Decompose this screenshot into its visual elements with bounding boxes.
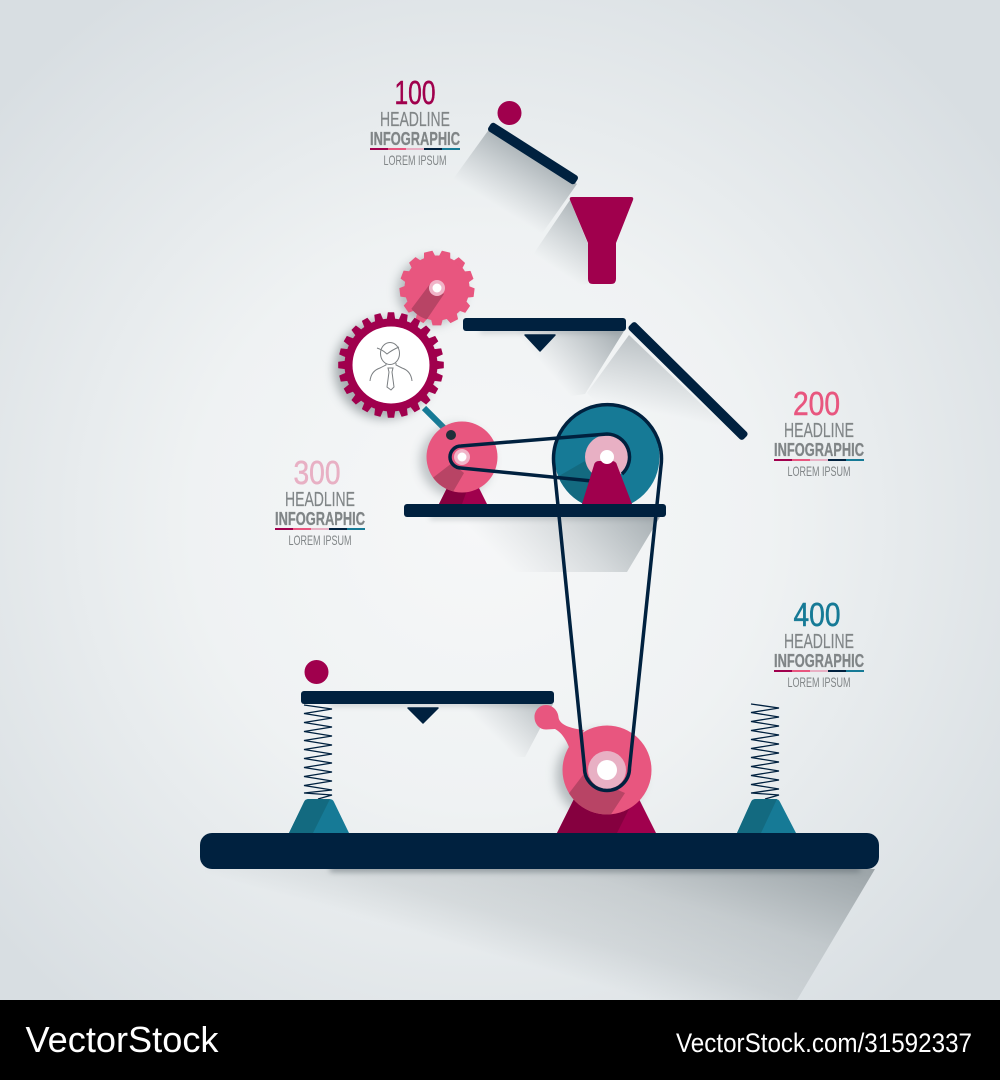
text block 100: HEADLINE	[380, 109, 450, 131]
text block 400: HEADLINE	[784, 631, 854, 653]
connecting rod	[424, 408, 452, 436]
spring right	[751, 704, 779, 799]
text block 300	[275, 454, 365, 548]
teal pulley stand	[582, 461, 632, 504]
lower lever pivot	[408, 708, 438, 723]
text block 200	[774, 385, 864, 479]
bottom pulley wheel with cam	[534, 705, 652, 822]
mid shelf	[404, 504, 666, 517]
text block 300: 300	[294, 454, 340, 491]
text block 200: INFOGRAPHIC	[774, 439, 864, 460]
base platform	[200, 833, 879, 869]
text block 300: HEADLINE	[285, 489, 355, 511]
text block 300: INFOGRAPHIC	[275, 508, 365, 529]
lower lever	[301, 691, 554, 704]
upper lever pivot	[525, 335, 555, 351]
gear shadow band	[412, 284, 444, 320]
bottom pulley stand	[557, 797, 656, 833]
text block 200: LOREM IPSUM	[788, 463, 850, 479]
footer logo: VectorStock	[26, 1019, 220, 1060]
left pulley soft shadow	[420, 425, 492, 497]
small belt	[450, 434, 630, 481]
right spring base	[737, 799, 796, 833]
large teal pulley	[555, 406, 660, 504]
teal pulley hub	[600, 450, 614, 464]
text block 100: 100	[394, 74, 436, 111]
tilted ramp right	[627, 321, 749, 441]
icon: person	[370, 342, 412, 390]
tilted ramp top	[487, 122, 579, 185]
text block 400	[774, 596, 864, 690]
long shadows	[205, 128, 875, 1000]
ball lower	[304, 660, 328, 684]
footer url: VectorStock.com/31592337	[676, 1028, 972, 1058]
left spring base	[289, 799, 349, 833]
text block 200: 200	[793, 385, 840, 422]
big gear with person	[334, 312, 444, 419]
text block 400: 400	[794, 596, 840, 633]
bottom pulley soft shadow	[556, 731, 644, 819]
text block 100: INFOGRAPHIC	[370, 128, 460, 149]
footer bar	[0, 1000, 1000, 1080]
upper lever	[463, 318, 626, 331]
text block 300: LOREM IPSUM	[288, 532, 352, 548]
left pulley wheel	[426, 422, 498, 497]
text block 400: LOREM IPSUM	[788, 674, 850, 690]
ball top	[498, 101, 522, 125]
small pink gear	[397, 251, 474, 325]
long belt	[554, 405, 662, 791]
rod pin	[446, 430, 456, 440]
text block 200: HEADLINE	[784, 420, 854, 442]
spring left	[304, 705, 332, 799]
text block 400: INFOGRAPHIC	[774, 650, 864, 671]
left pulley stand	[439, 482, 487, 504]
text block 100	[370, 74, 460, 168]
funnel	[570, 197, 633, 284]
text block 100: LOREM IPSUM	[384, 152, 446, 168]
